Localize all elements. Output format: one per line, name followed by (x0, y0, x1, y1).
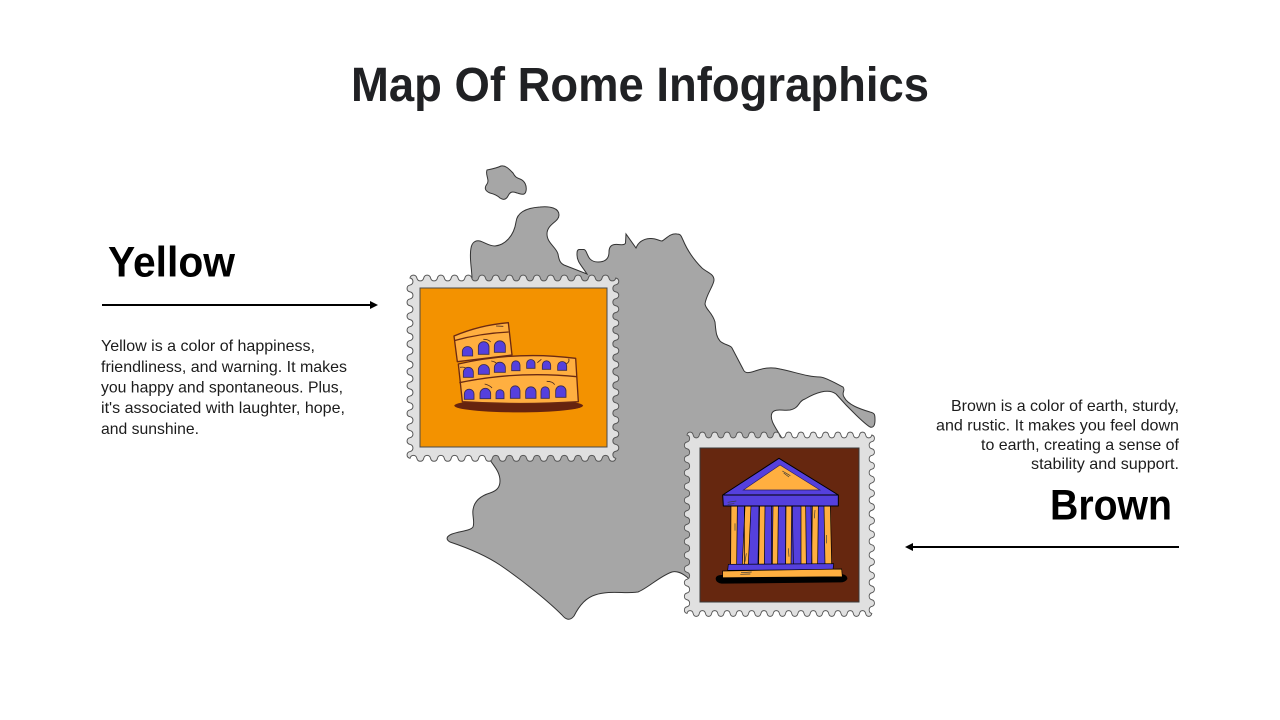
text block: Brown description: Brown is a color of earth, sturdy, (951, 398, 1179, 415)
map: island (485, 166, 526, 199)
stamp: temple on brown (684, 432, 874, 616)
icon: temple (716, 458, 847, 584)
text block: Yellow description: you happy and spontaneous. Plus, (101, 380, 343, 396)
text block: Brown description (936, 398, 1180, 473)
text block: Brown description: to earth, creating a sense of (981, 437, 1180, 454)
stamp field: brown (700, 448, 859, 602)
heading: Yellow: Yellow (108, 238, 236, 286)
map: mainland (447, 207, 875, 619)
stamp field: yellow (420, 288, 607, 447)
section: Brown (905, 398, 1180, 551)
heading: Brown: Brown (1050, 482, 1172, 530)
text block: Brown description: and rustic. It makes you feel down (936, 418, 1179, 434)
stamp border: yellow (407, 275, 619, 461)
arrow: pointing right to map (102, 301, 378, 309)
text block: Yellow description: it's associated with laughter, hope, (101, 400, 345, 417)
text block: Yellow description: friendliness, and warning. It makes (101, 359, 347, 376)
text block: Brown description: stability and support. (1031, 456, 1179, 473)
stamp: Colosseum on yellow (407, 275, 619, 461)
section: Yellow (101, 238, 378, 438)
stamp border: brown (684, 432, 874, 616)
text block: Yellow description: and sunshine. (101, 421, 199, 438)
text block: Yellow description (101, 338, 347, 438)
map of Rome (447, 166, 875, 619)
arrow: pointing left to map (905, 543, 1179, 551)
title: Map Of Rome Infographics (351, 59, 929, 112)
icon: Colosseum (454, 323, 583, 412)
text block: Yellow description: Yellow is a color of happiness, (101, 338, 315, 355)
